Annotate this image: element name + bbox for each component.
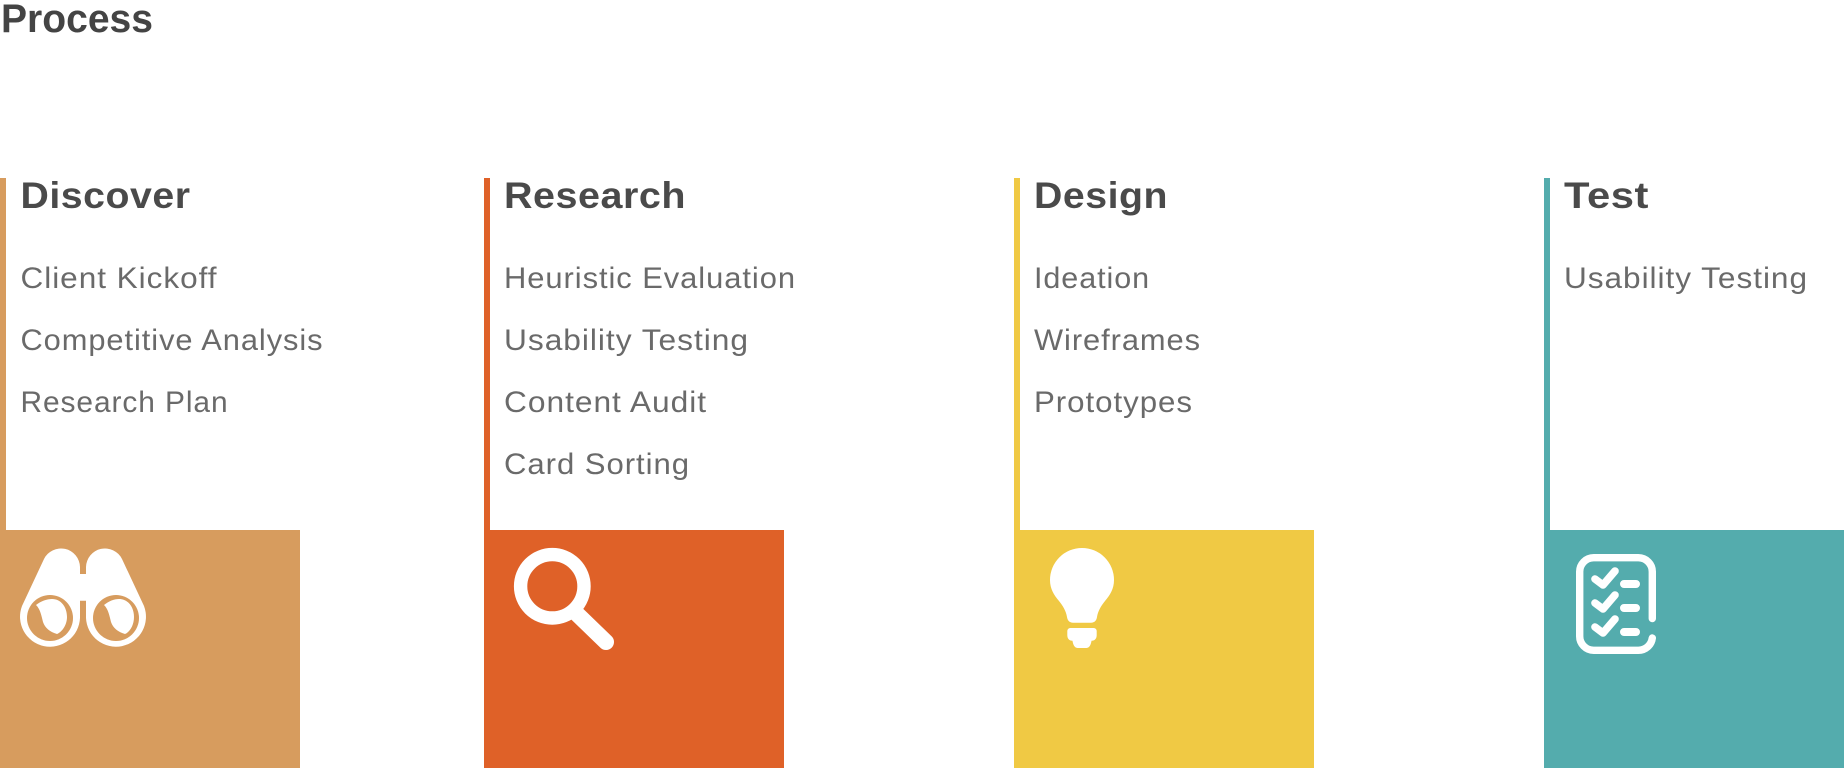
- heading: discover: Discover: [20, 174, 190, 216]
- list: design: Ideation: [1034, 262, 1150, 295]
- icon: binoculars: [20, 548, 146, 647]
- panel: research: [484, 174, 796, 768]
- accent bar: design: [1014, 178, 1020, 538]
- accent bar: discover: [0, 178, 6, 538]
- list: discover: Client Kickoff: [20, 262, 218, 295]
- icon: magnifying glass: [521, 555, 606, 642]
- icon: light bulb: [1050, 548, 1114, 648]
- list: discover: Research Plan: [20, 386, 228, 419]
- list: design: Wireframes: [1034, 324, 1201, 357]
- heading: design: Design: [1034, 174, 1168, 216]
- icon: checklist: [1580, 558, 1652, 650]
- panel: discover: [0, 174, 324, 768]
- list: research: [504, 262, 796, 481]
- heading: research: Research: [504, 174, 686, 216]
- accent bar: research: [484, 178, 490, 538]
- list: discover: Competitive Analysis: [20, 324, 324, 357]
- heading: test: Test: [1564, 174, 1649, 216]
- color block: test: [1544, 530, 1844, 768]
- color block: design: [1014, 530, 1314, 768]
- list: design: Prototypes: [1034, 386, 1193, 419]
- list: research: Usability Testing: [504, 324, 749, 357]
- accent bar: test: [1544, 178, 1550, 538]
- panel: design: [1014, 174, 1314, 768]
- list: research: Content Audit: [504, 386, 707, 419]
- list: discover: [20, 262, 324, 419]
- list: design: [1034, 262, 1201, 419]
- color block: research: [484, 530, 784, 768]
- list: research: Heuristic Evaluation: [504, 262, 796, 295]
- list: test: Usability Testing: [1564, 262, 1808, 295]
- color block: discover: [0, 530, 300, 768]
- panel: test: [1544, 174, 1844, 768]
- list: research: Card Sorting: [504, 448, 690, 481]
